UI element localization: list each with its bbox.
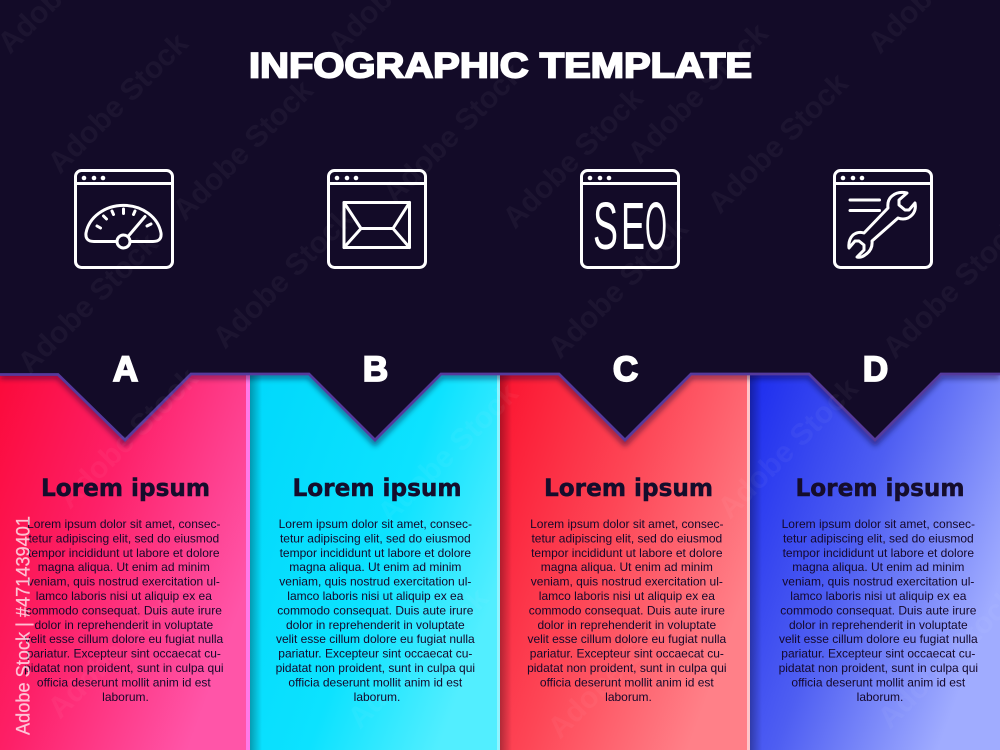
text block C: lamco laboris nisi ut aliquip ex ea	[539, 589, 715, 603]
watermark: Adobe Stock	[342, 582, 495, 735]
text block B: magna aliqua. Ut enim ad minim	[289, 560, 461, 574]
watermark: Adobe Stock	[167, 74, 320, 227]
text block D: magna aliqua. Ut enim ad minim	[792, 560, 964, 574]
text block D: tempor incididunt ut labore et dolore	[783, 546, 974, 560]
text block B: pidatat non proident, sunt in culpa qui	[276, 661, 475, 675]
panel: A	[0, 375, 250, 750]
text block C: commodo consequat. Duis aute irure	[529, 603, 725, 617]
text block A: velit esse cillum dolore eu fugiat nulla	[24, 632, 224, 646]
text block A: tetur adipiscing elit, sed do eiusmod	[28, 531, 219, 545]
notched dark header edge	[0, 0, 1000, 439]
vertical stock id label: Adobe Stock | #471439401	[14, 516, 34, 735]
text block D: dolor in reprehenderit in voluptate	[789, 618, 968, 632]
notch shadow	[0, 376, 1000, 443]
text block A: tempor incididunt ut labore et dolore	[28, 546, 220, 560]
text block D: commodo consequat. Duis aute irure	[780, 603, 977, 617]
icon: browser SEO: O	[645, 189, 667, 264]
text block D: Lorem ipsum dolor sit amet, consec-	[782, 517, 975, 531]
letter A: A	[113, 350, 138, 389]
watermark: Adobe Stock	[42, 572, 195, 725]
watermark: Adobe Stock	[542, 212, 695, 365]
text block D: pidatat non proident, sunt in culpa qui	[779, 661, 978, 675]
text block C: magna aliqua. Ut enim ad minim	[541, 560, 713, 574]
text block C: pariatur. Excepteur sint occaecat cu-	[530, 647, 724, 661]
text block D: lamco laboris nisi ut aliquip ex ea	[790, 589, 967, 603]
text block C: officia deserunt mollit anim id est	[540, 675, 714, 689]
watermark: Adobe Stock	[712, 372, 865, 525]
watermark: Adobe Stock	[702, 67, 855, 220]
watermark: Adobe Stock	[622, 17, 775, 170]
text block C: veniam, quis nostrud exercitation ul-	[531, 575, 723, 589]
text block B: officia deserunt mollit anim id est	[288, 675, 463, 689]
panel: C	[500, 375, 750, 750]
title: INFOGRAPHIC TEMPLATE	[249, 46, 752, 86]
watermark: Adobe Stock	[372, 377, 525, 530]
panel: B	[250, 375, 500, 750]
text block C: tempor incididunt ut labore et dolore	[531, 546, 723, 560]
icon: browser envelope	[328, 170, 426, 268]
heading D: Lorem ipsum	[796, 474, 964, 502]
text block A: officia deserunt mollit anim id est	[37, 675, 211, 689]
text block D: velit esse cillum dolore eu fugiat nulla	[779, 632, 978, 646]
text block C: laborum.	[605, 690, 652, 704]
icon: browser SEO: E	[621, 189, 645, 264]
text block D: officia deserunt mollit anim id est	[791, 675, 966, 689]
watermark: Adobe Stock	[497, 82, 650, 235]
icon: browser wrench	[834, 170, 932, 268]
watermark: Adobe Stock	[542, 592, 695, 745]
text block B: tempor incididunt ut labore et dolore	[280, 546, 471, 560]
text block B: commodo consequat. Duis aute irure	[277, 603, 474, 617]
text block A: Lorem ipsum dolor sit amet, consec-	[27, 517, 221, 531]
heading B: Lorem ipsum	[292, 474, 462, 502]
text block C: dolor in reprehenderit in voluptate	[537, 618, 717, 632]
watermark: Adobe Stock	[207, 202, 360, 355]
watermark: Adobe Stock	[52, 362, 205, 515]
letter B: B	[363, 350, 388, 389]
watermark: Adobe Stock	[377, 57, 530, 210]
text block A: lamco laboris nisi ut aliquip ex ea	[36, 589, 212, 603]
text block A: laborum.	[102, 690, 149, 704]
icon: browser speedometer	[76, 170, 172, 268]
text block C: Lorem ipsum dolor sit amet, consec-	[530, 517, 724, 531]
text block A: pariatur. Excepteur sint occaecat cu-	[27, 647, 221, 661]
text block A: magna aliqua. Ut enim ad minim	[38, 560, 210, 574]
text block C: pidatat non proident, sunt in culpa qui	[527, 661, 727, 675]
text block B: dolor in reprehenderit in voluptate	[286, 618, 465, 632]
text block B: veniam, quis nostrud exercitation ul-	[279, 575, 471, 589]
text block C: velit esse cillum dolore eu fugiat nulla	[527, 632, 727, 646]
letter D: D	[863, 350, 888, 389]
text block A: commodo consequat. Duis aute irure	[26, 603, 222, 617]
panel: D	[750, 375, 1000, 750]
heading A: Lorem ipsum	[41, 474, 210, 502]
text block A: pidatat non proident, sunt in culpa qui	[24, 661, 224, 675]
text block D: pariatur. Excepteur sint occaecat cu-	[781, 647, 975, 661]
text block D: tetur adipiscing elit, sed do eiusmod	[783, 531, 974, 545]
text block B: velit esse cillum dolore eu fugiat nulla	[276, 632, 475, 646]
icon: browser SEO	[582, 170, 678, 268]
text block A: dolor in reprehenderit in voluptate	[34, 618, 214, 632]
text block B: pariatur. Excepteur sint occaecat cu-	[278, 647, 472, 661]
text block B: tetur adipiscing elit, sed do eiusmod	[280, 531, 471, 545]
letter C: C	[613, 350, 638, 389]
purple notch outline	[0, 374, 1000, 440]
text block D: veniam, quis nostrud exercitation ul-	[782, 575, 974, 589]
text block B: Lorem ipsum dolor sit amet, consec-	[279, 517, 472, 531]
icon: browser SEO: S	[593, 189, 618, 264]
text block C: tetur adipiscing elit, sed do eiusmod	[531, 531, 722, 545]
watermark: Adobe Stock	[42, 27, 195, 180]
text block D: laborum.	[857, 690, 903, 704]
watermark: Adobe Stock	[12, 227, 165, 380]
text block B: lamco laboris nisi ut aliquip ex ea	[287, 589, 464, 603]
heading C: Lorem ipsum	[544, 474, 713, 502]
text block A: veniam, quis nostrud exercitation ul-	[28, 575, 220, 589]
text block B: laborum.	[354, 690, 400, 704]
